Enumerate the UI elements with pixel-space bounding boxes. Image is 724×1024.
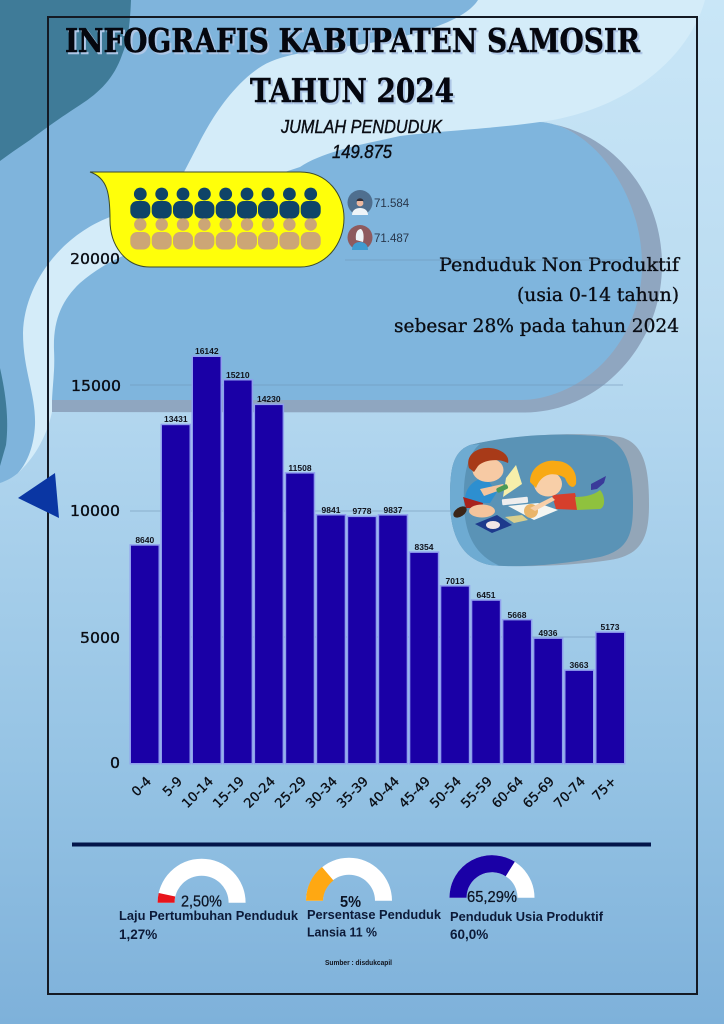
y axis labels: 10000 — [70, 502, 120, 520]
gauge: laju pertumbuhan: Laju Pertumbuhan Penduduk — [119, 908, 299, 923]
icon: left triangle — [18, 473, 59, 518]
grid lines — [130, 260, 623, 637]
age group axis labels: 30-34 — [304, 774, 341, 812]
divider line — [72, 842, 651, 846]
age group axis labels: 70-74 — [552, 774, 589, 812]
icon: male avatar — [348, 190, 372, 215]
bar value labels: 14230 — [257, 394, 281, 404]
age group axis labels: 20-24 — [242, 774, 279, 812]
total population: JUMLAH PENDUDUK — [280, 117, 443, 137]
bar value labels: 5668 — [508, 610, 527, 620]
age group axis labels: 40-44 — [366, 774, 403, 812]
source note: Sumber : disdukcapil — [325, 960, 392, 967]
age group axis labels: 60-64 — [490, 774, 527, 812]
bar value labels: 4936 — [539, 628, 558, 638]
bar value labels: 11508 — [288, 463, 312, 473]
icon: boy — [451, 448, 522, 520]
age group axis labels: 50-54 — [428, 774, 465, 812]
y axis labels — [70, 250, 121, 772]
non-productive population text: (usia 0-14 tahun) — [517, 284, 679, 306]
gauge: persentase lansia — [306, 858, 442, 940]
icon: female avatar — [348, 225, 372, 250]
gauge: usia produktif: Penduduk Usia Produktif — [450, 909, 604, 924]
bar value labels — [135, 346, 620, 670]
title — [65, 21, 642, 112]
gauge: persentase lansia: Persentase Penduduk — [307, 907, 442, 922]
age group axis labels: 45-49 — [397, 774, 434, 812]
gauge: laju pertumbuhan: 2,50% — [181, 894, 222, 910]
non-productive population text: sebesar 28% pada tahun 2024 — [394, 315, 679, 337]
age group axis labels: 15-19 — [211, 774, 248, 812]
bar value labels: 9837 — [384, 505, 403, 515]
gauge: persentase lansia: Lansia 11 % — [307, 924, 377, 940]
bar value labels: 7013 — [446, 576, 465, 586]
bar chart — [129, 346, 624, 812]
bar value labels: 16142 — [195, 346, 219, 356]
age group axis labels — [129, 774, 620, 812]
female count: 71.487 — [374, 233, 409, 245]
speech bubble with people icons — [90, 172, 344, 267]
bar value labels: 15210 — [226, 370, 250, 380]
non-productive population text — [394, 254, 681, 337]
y axis labels: 0 — [110, 754, 120, 772]
gauge: persentase lansia: 5% — [340, 894, 361, 911]
gauge: laju pertumbuhan: 1,27% — [119, 927, 157, 942]
bar value labels: 6451 — [477, 590, 496, 600]
bar value labels: 13431 — [164, 414, 188, 424]
icon: girl — [502, 461, 606, 520]
age group axis labels: 35-39 — [335, 774, 372, 812]
gauge: usia produktif — [450, 855, 604, 942]
age group axis labels: 75+ — [590, 774, 620, 804]
age group axis labels: 0-4 — [129, 774, 155, 800]
bar value labels: 9841 — [322, 505, 341, 515]
gauge: laju pertumbuhan — [119, 859, 299, 942]
age group axis labels: 65-69 — [521, 774, 558, 812]
title: TAHUN 2024 — [250, 71, 454, 110]
total population: 149.875 — [332, 142, 393, 162]
y axis labels: 5000 — [80, 629, 120, 647]
panel: children illustration — [450, 434, 649, 566]
icon: book — [475, 515, 512, 533]
y axis labels: 15000 — [71, 377, 121, 395]
bar value labels: 8640 — [135, 535, 155, 545]
age group axis labels: 10-14 — [180, 774, 217, 812]
age group axis labels: 25-29 — [273, 774, 310, 812]
icon: female population row — [130, 218, 321, 250]
y axis labels: 20000 — [70, 250, 120, 268]
title: TAHUN 2024 — [252, 73, 456, 112]
bar value labels: 8354 — [415, 542, 434, 552]
gauge: usia produktif: 65,29% — [467, 889, 517, 906]
male count: 71.584 — [374, 198, 410, 210]
icon: male population row — [130, 188, 321, 218]
total population — [280, 117, 443, 162]
bar value labels: 9778 — [353, 506, 372, 516]
bar value labels: 5173 — [601, 622, 620, 632]
age group axis labels: 5-9 — [160, 774, 186, 800]
age group axis labels: 55-59 — [459, 774, 496, 812]
non-productive population text: Penduduk Non Produktif — [439, 254, 681, 276]
bar value labels: 3663 — [570, 660, 589, 670]
gauge: usia produktif: 60,0% — [450, 927, 488, 942]
